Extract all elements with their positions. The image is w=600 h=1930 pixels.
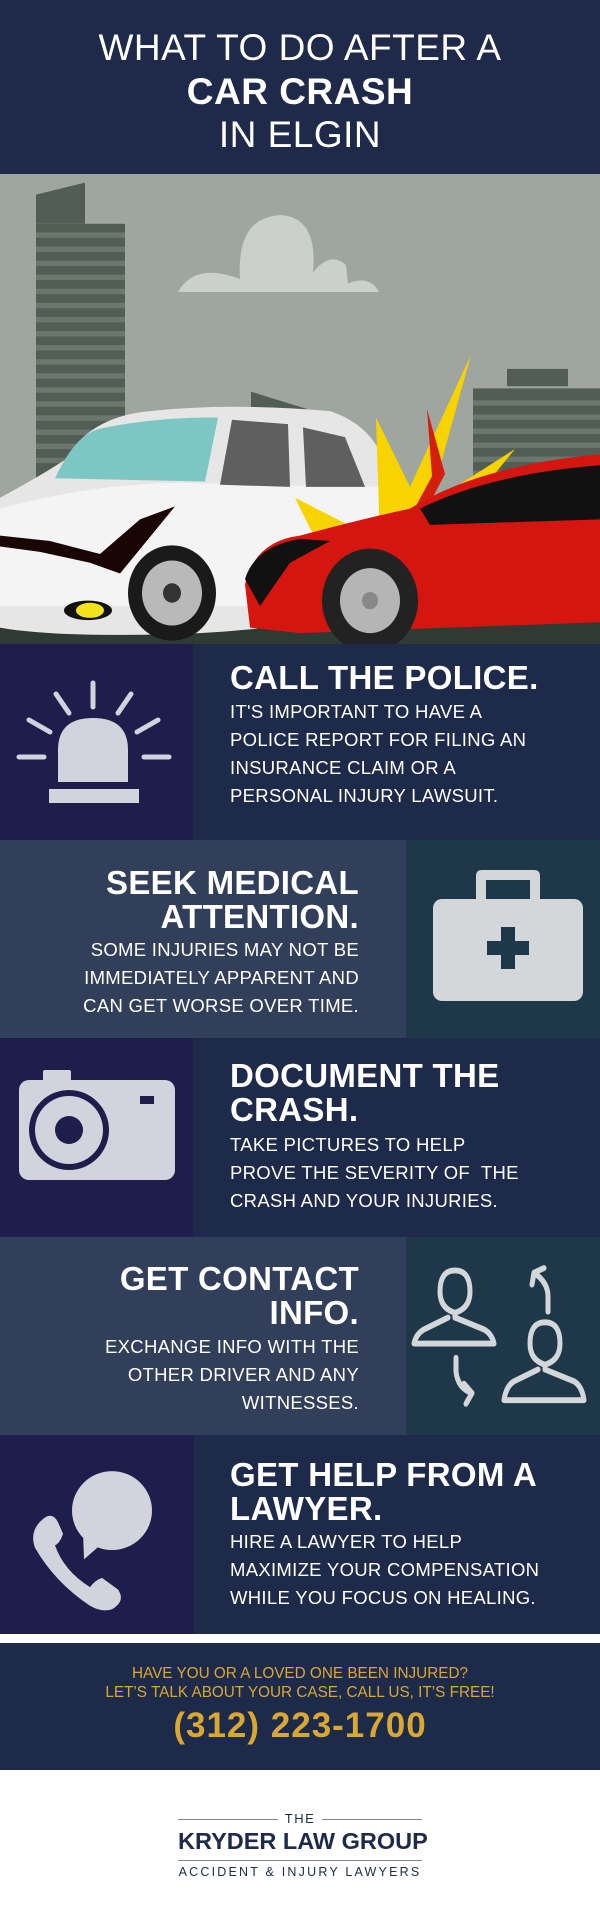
heading	[230, 1456, 537, 1527]
body text: WITNESSES.	[242, 1392, 359, 1413]
logo: ACCIDENT & INJURY LAWYERS	[179, 1865, 421, 1879]
CTA text	[105, 1665, 495, 1701]
heading: GET CONTACT	[120, 1260, 359, 1297]
body text: IT'S IMPORTANT TO HAVE A	[230, 701, 482, 722]
panel: get contact info	[0, 1237, 600, 1435]
CTA text: HAVE YOU OR A LOVED ONE BEEN INJURED?	[132, 1665, 468, 1682]
title: CAR CRASH	[187, 70, 413, 112]
body text	[105, 1336, 359, 1413]
body text: CRASH AND YOUR INJURIES.	[230, 1190, 498, 1211]
heading	[230, 1057, 499, 1128]
heading: INFO.	[270, 1294, 359, 1331]
heading	[106, 864, 359, 935]
body text	[230, 1531, 539, 1608]
body text: CAN GET WORSE OVER TIME.	[83, 995, 359, 1016]
panel: get help from a lawyer	[0, 1435, 600, 1634]
title: IN ELGIN	[219, 114, 381, 155]
body text: TAKE PICTURES TO HELP	[230, 1134, 466, 1155]
body text	[230, 1134, 519, 1211]
call to action	[0, 1643, 600, 1770]
heading: DOCUMENT THE	[230, 1057, 499, 1094]
explosion	[295, 355, 515, 568]
phone number: (312) 223-1700	[173, 1706, 427, 1745]
icon: siren	[0, 644, 193, 840]
body text: PROVE THE SEVERITY OF THE	[230, 1162, 519, 1183]
white car	[0, 407, 395, 641]
body text	[83, 939, 359, 1016]
heading: LAWYER.	[230, 1490, 382, 1527]
header	[0, 0, 600, 175]
red car	[245, 454, 600, 653]
body text	[230, 701, 526, 806]
body text: WHILE YOU FOCUS ON HEALING.	[230, 1587, 536, 1608]
panel: call the police	[0, 644, 600, 840]
heading: CRASH.	[230, 1091, 358, 1128]
body text: EXCHANGE INFO WITH THE	[105, 1336, 359, 1357]
body text: IMMEDIATELY APPARENT AND	[84, 967, 359, 988]
body text: MAXIMIZE YOUR COMPENSATION	[230, 1559, 539, 1580]
body text: HIRE A LAWYER TO HELP	[230, 1531, 462, 1552]
heading: CALL THE POLICE.	[230, 659, 539, 696]
illustration: car crash	[0, 174, 600, 644]
title	[98, 27, 502, 155]
icon: people exchange	[406, 1237, 600, 1435]
logo: THE	[285, 1811, 315, 1826]
panel: seek medical attention	[0, 840, 600, 1038]
panel: document the crash	[0, 1038, 600, 1237]
body text: POLICE REPORT FOR FILING AN	[230, 729, 526, 750]
title: WHAT TO DO AFTER A	[98, 27, 502, 68]
body text: OTHER DRIVER AND ANY	[128, 1364, 359, 1385]
icon: camera	[0, 1038, 193, 1237]
logo: KRYDER LAW GROUP	[178, 1828, 428, 1854]
body text: PERSONAL INJURY LAWSUIT.	[230, 785, 498, 806]
body text: SOME INJURIES MAY NOT BE	[91, 939, 359, 960]
heading: GET HELP FROM A	[230, 1456, 537, 1493]
body text: INSURANCE CLAIM OR A	[230, 757, 456, 778]
CTA text: LET’S TALK ABOUT YOUR CASE, CALL US, IT’S FREE!	[105, 1684, 495, 1701]
heading: SEEK MEDICAL	[106, 864, 359, 901]
logo	[178, 1811, 428, 1879]
icon: phone with speech bubble	[0, 1435, 194, 1634]
heading	[120, 1260, 359, 1331]
cloud	[178, 215, 379, 292]
heading: ATTENTION.	[160, 898, 359, 935]
icon: first aid kit	[406, 840, 600, 1038]
